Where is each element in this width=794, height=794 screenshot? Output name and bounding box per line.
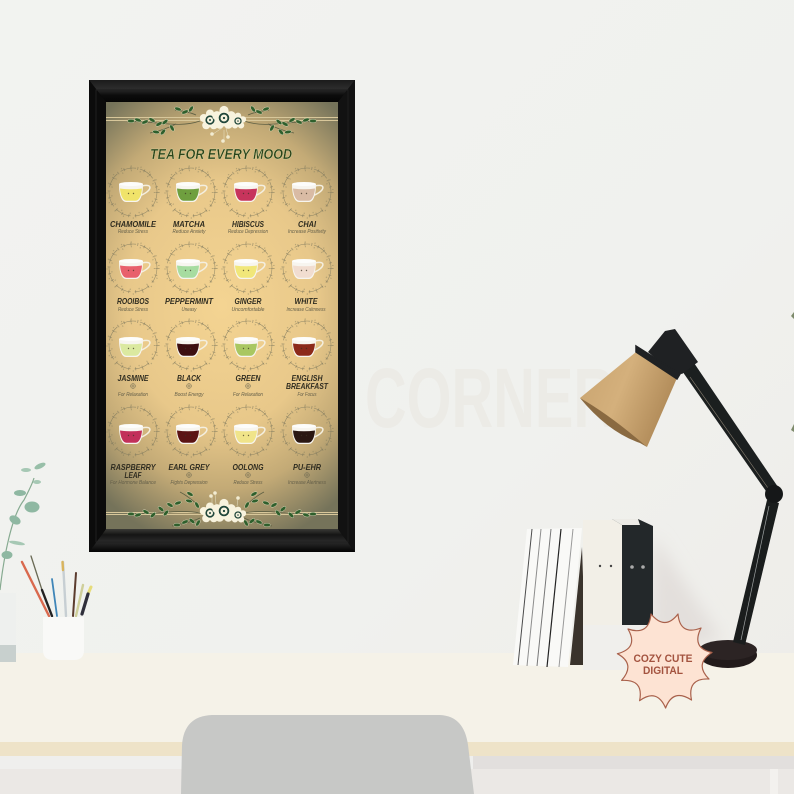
joint — [765, 485, 783, 503]
tea: Matcha: MATCHA — [173, 220, 205, 229]
lamp base — [699, 642, 757, 668]
tea: Matcha — [165, 166, 217, 235]
tea: Jasmine: For Relaxation — [118, 392, 148, 398]
tea: Peppermint: PEPPERMINT — [165, 297, 214, 306]
desk — [0, 653, 794, 794]
tea: Raspberry Leaf: RASPBERRY — [110, 463, 156, 472]
tea: Raspberry Leaf: For Hormone Balance — [110, 480, 156, 486]
faint watermark: CORNER — [365, 351, 615, 445]
chair — [181, 715, 474, 794]
tea: Rooibos: ROOIBOS — [117, 297, 150, 306]
tea: Rooibos — [107, 242, 159, 313]
desk lamp — [580, 329, 783, 668]
badge: Cozy Cute Digital: COZY CUTE — [634, 653, 692, 665]
tea: Hibiscus: Reduce Depression — [228, 229, 268, 235]
tea: Ginger — [222, 242, 274, 313]
tea: Green: For Relaxation — [233, 392, 263, 398]
tea: Chai — [281, 166, 333, 235]
tea: White — [281, 242, 333, 313]
tea: Rooibos: Reduce Stress — [118, 307, 148, 313]
tea: Chai: CHAI — [298, 220, 317, 229]
badge: Cozy Cute Digital — [617, 614, 712, 708]
plant and vase — [0, 461, 46, 662]
pencil cup — [22, 556, 91, 660]
tea: Hibiscus — [222, 166, 274, 235]
tea: Ginger: Uncomfortable — [232, 307, 264, 313]
tea: English Breakfast: BREAKFAST — [286, 382, 329, 391]
title: TEA FOR EVERY MOOD — [150, 146, 292, 163]
tea: Ginger: GINGER — [234, 297, 262, 306]
tea: Pu-Ehr — [281, 405, 333, 486]
tea: Pu-Ehr: Increase Alertness — [288, 480, 326, 486]
tea: Raspberry Leaf — [107, 405, 159, 486]
tea: Black: BLACK — [177, 374, 202, 383]
tea: Oolong: OOLONG — [232, 463, 264, 472]
top floral ornament — [106, 105, 338, 143]
tea: Oolong — [222, 405, 274, 486]
tea: Chamomile: CHAMOMILE — [110, 220, 157, 229]
tea: Oolong: Reduce Stress — [234, 480, 263, 486]
bottom floral ornament — [106, 491, 338, 527]
upper arm — [680, 360, 778, 494]
tea: Hibiscus: HIBISCUS — [232, 220, 265, 229]
frame — [89, 80, 355, 552]
tea: English Breakfast: ENGLISH — [292, 374, 323, 383]
tea: English Breakfast: For Focus — [298, 392, 317, 398]
tea: Matcha: Reduce Anxiety — [172, 229, 206, 235]
framed poster — [89, 80, 355, 552]
tea: White: WHITE — [294, 297, 318, 306]
white binder — [583, 520, 627, 670]
tea: Earl Grey — [165, 405, 217, 486]
lower arm — [733, 500, 779, 645]
black binder — [612, 519, 653, 625]
tea: Chai: Increase Positivity — [288, 229, 326, 235]
tea: Jasmine: JASMINE — [118, 374, 149, 383]
tea: Chamomile: Reduce Stress — [118, 229, 148, 235]
tea: Earl Grey: Fights Depression — [170, 480, 208, 486]
right edge plant — [791, 312, 794, 432]
magazines — [513, 528, 586, 667]
tea: Green: GREEN — [236, 374, 261, 383]
badge: Cozy Cute Digital: DIGITAL — [643, 665, 683, 677]
tea: English Breakfast — [281, 319, 333, 398]
poster paper — [106, 102, 338, 529]
tea: Pu-Ehr: PU-EHR — [293, 463, 321, 472]
tea: White: Increase Calmness — [286, 307, 326, 313]
tea: Peppermint: Uneasy — [182, 307, 197, 313]
tea: Raspberry Leaf: LEAF — [124, 471, 142, 480]
tea: Green — [222, 319, 274, 398]
tea: Black — [165, 319, 217, 398]
tea: Earl Grey: EARL GREY — [168, 463, 210, 472]
tea: Peppermint — [165, 242, 217, 313]
lamp shade — [580, 352, 677, 447]
tea: Jasmine — [107, 319, 159, 398]
tea: Chamomile — [107, 166, 159, 235]
wall shadow behind books — [650, 535, 722, 650]
tea: Black: Boost Energy — [174, 392, 204, 398]
lamp head — [648, 329, 698, 374]
